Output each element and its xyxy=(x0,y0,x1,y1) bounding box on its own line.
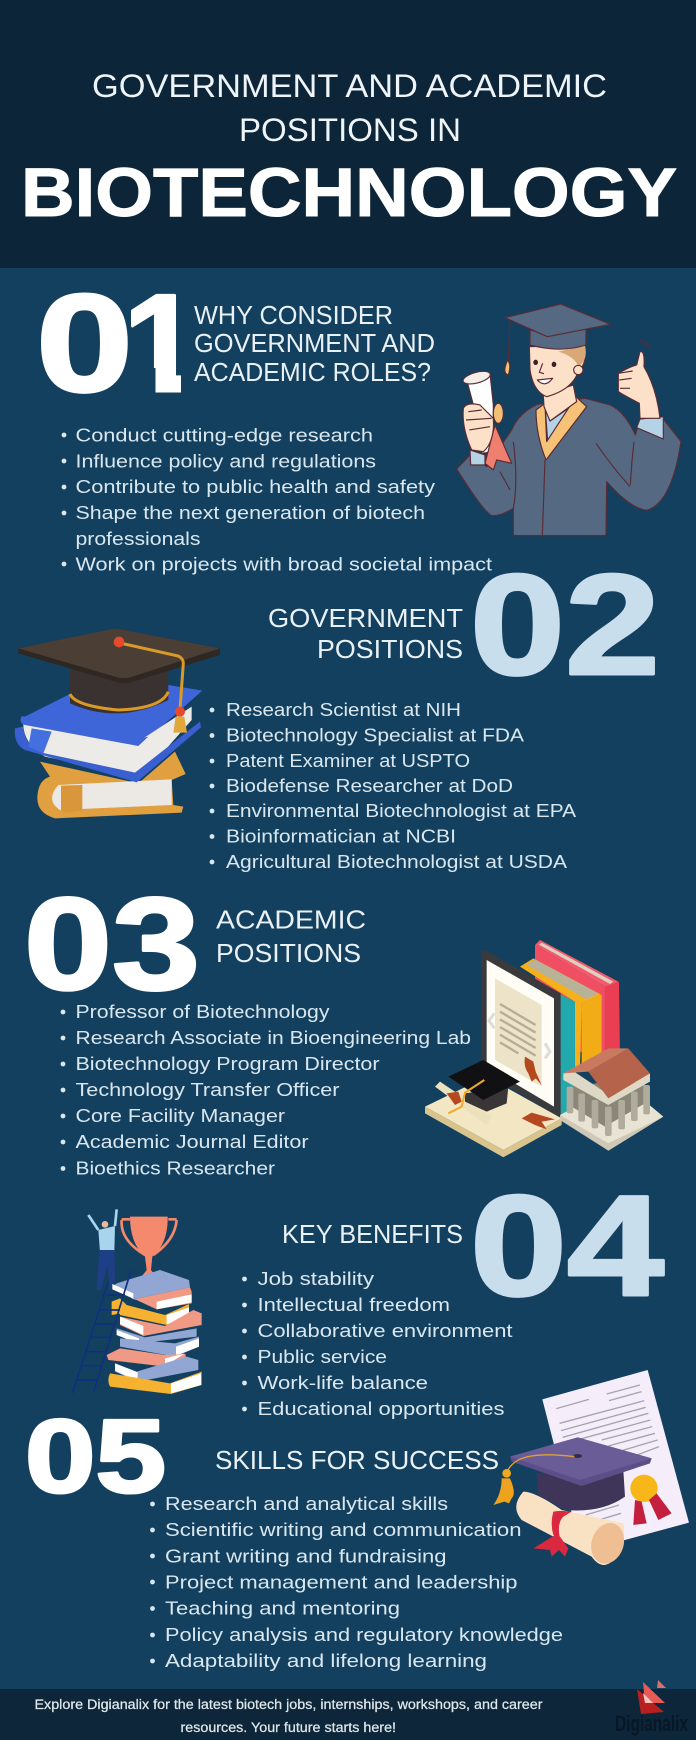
list 03: Core Facility Manager xyxy=(76,1105,285,1126)
list 04: Job stability xyxy=(258,1268,375,1289)
heading 01 xyxy=(194,300,435,387)
heading 03: POSITIONS xyxy=(216,938,361,968)
illustration: graduate with diploma xyxy=(457,304,681,536)
list 01: Shape the next generation of biotech xyxy=(76,502,425,523)
section 05 xyxy=(25,1370,689,1671)
list 01 xyxy=(62,424,492,574)
title: BIOTECHNOLOGY xyxy=(21,154,677,231)
number 02: 02 xyxy=(470,546,660,705)
number 03: 03 xyxy=(24,870,200,1017)
list 05: Adaptability and lifelong learning xyxy=(165,1650,487,1671)
number 01: 0 xyxy=(36,266,133,421)
list 03: Biotechnology Program Director xyxy=(76,1053,380,1074)
list 02: Biotechnology Specialist at FDA xyxy=(226,724,525,746)
heading 03: ACADEMIC xyxy=(216,904,366,934)
illustration: trophy on book stack xyxy=(72,1209,202,1394)
list 02 xyxy=(210,699,577,872)
list 05: Research and analytical skills xyxy=(165,1493,448,1514)
list 02: Biodefense Researcher at DoD xyxy=(226,775,513,796)
heading 04: KEY BENEFITS xyxy=(282,1219,463,1249)
list 01: Work on projects with broad societal impact xyxy=(76,554,492,574)
number 05: 05 xyxy=(25,1399,166,1515)
list 05: Teaching and mentoring xyxy=(165,1598,400,1618)
illustration: graduation cap on books xyxy=(15,628,220,818)
title: GOVERNMENT AND ACADEMIC xyxy=(92,68,607,104)
title xyxy=(21,68,677,231)
list 02: Research Scientist at NIH xyxy=(226,699,461,720)
list 02: Agricultural Biotechnologist at USDA xyxy=(226,851,568,872)
illustration: academic books and building xyxy=(425,940,663,1157)
heading 01: GOVERNMENT AND xyxy=(194,328,435,358)
list 02: Bioinformatician at NCBI xyxy=(226,826,456,846)
list 01: professionals xyxy=(76,528,200,549)
section 02 xyxy=(15,546,660,872)
list 03: Research Associate in Bioengineering Lab xyxy=(76,1027,471,1048)
list 04: Public service xyxy=(258,1346,387,1367)
list 03: Professor of Biotechnology xyxy=(76,1001,330,1022)
footer text xyxy=(34,1697,543,1735)
number 01: 1 xyxy=(123,266,200,421)
number 04: 04 xyxy=(470,1167,664,1326)
list 03: Bioethics Researcher xyxy=(76,1158,275,1178)
heading 01: ACADEMIC ROLES? xyxy=(194,357,431,387)
section 01 xyxy=(36,266,681,574)
list 05: Policy analysis and regulatory knowledge xyxy=(165,1624,563,1645)
list 04: Intellectual freedom xyxy=(258,1294,450,1315)
list 05: Scientific writing and communication xyxy=(165,1519,522,1540)
list 04: Work-life balance xyxy=(258,1372,428,1393)
title: POSITIONS IN xyxy=(239,112,461,148)
heading 02: GOVERNMENT xyxy=(268,603,463,633)
list 04: Collaborative environment xyxy=(258,1320,512,1341)
logo: Digianalix xyxy=(615,1680,689,1736)
illustration: diploma and purple cap xyxy=(493,1370,689,1568)
section 03 xyxy=(24,870,663,1178)
heading 03 xyxy=(216,904,366,968)
section 04 xyxy=(72,1167,664,1419)
list 05 xyxy=(150,1493,563,1671)
heading 02 xyxy=(268,603,463,664)
list 04: Educational opportunities xyxy=(258,1398,504,1419)
list 01: Contribute to public health and safety xyxy=(76,476,436,497)
list 04 xyxy=(242,1268,512,1419)
list 01: Influence policy and regulations xyxy=(76,450,376,472)
list 01: Conduct cutting-edge research xyxy=(76,424,373,446)
list 03: Academic Journal Editor xyxy=(76,1131,308,1152)
list 02: Patent Examiner at USPTO xyxy=(226,750,470,771)
heading 02: POSITIONS xyxy=(317,634,463,664)
heading 05: SKILLS FOR SUCCESS xyxy=(215,1445,499,1475)
list 05: Project management and leadership xyxy=(165,1572,518,1592)
footer text: resources. Your future starts here! xyxy=(180,1720,396,1735)
header banner xyxy=(0,0,696,268)
list 05: Grant writing and fundraising xyxy=(165,1546,446,1566)
list 02: Environmental Biotechnologist at EPA xyxy=(226,800,577,821)
heading 01: WHY CONSIDER xyxy=(194,300,393,330)
footer bar xyxy=(0,1680,696,1740)
list 03: Technology Transfer Officer xyxy=(76,1079,340,1100)
footer text: Explore Digianalix for the latest biotech jobs, internships, workshops, and career xyxy=(34,1697,543,1712)
number 01 xyxy=(36,266,206,421)
list 03 xyxy=(61,1001,471,1178)
